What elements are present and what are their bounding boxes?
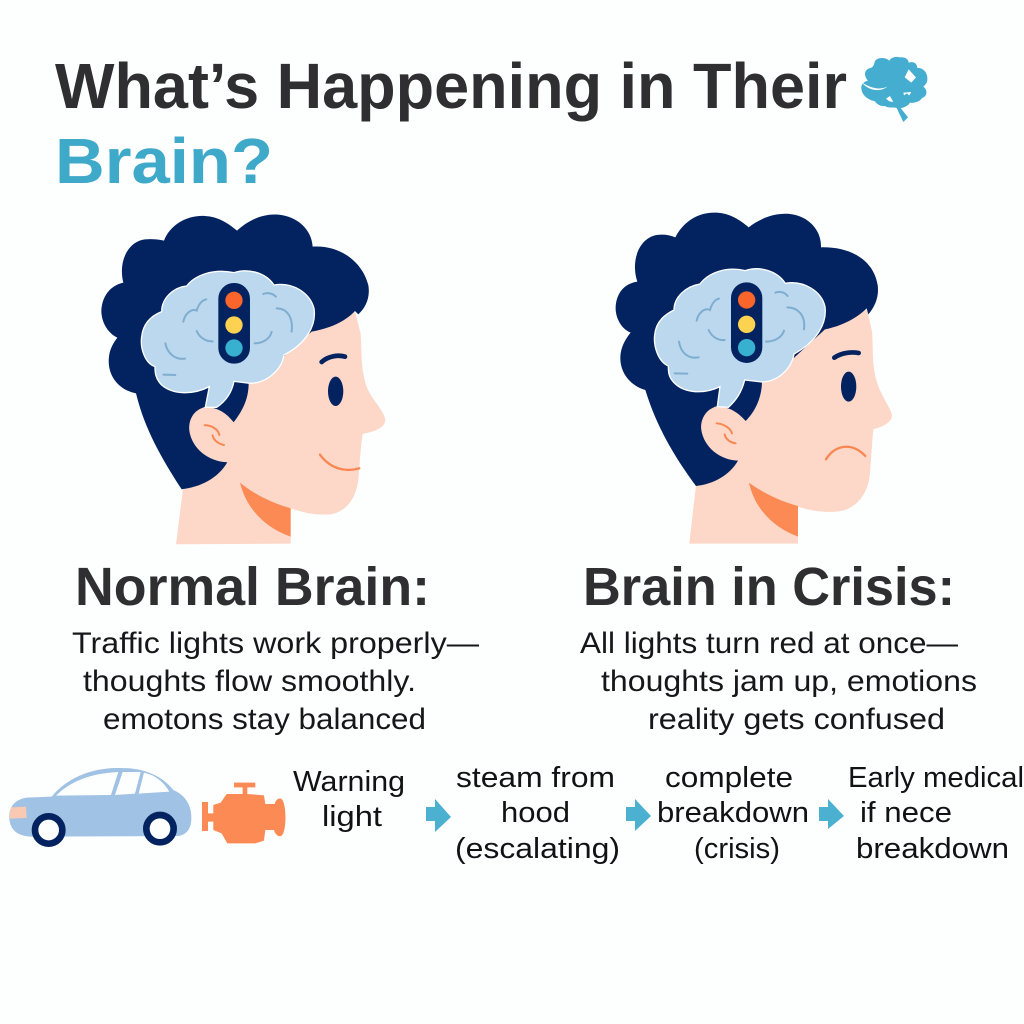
icon: car bbox=[9, 768, 191, 844]
arrow 1 bbox=[426, 799, 451, 832]
head skin bbox=[176, 312, 385, 544]
label: warning light bbox=[293, 766, 405, 833]
label: steam from hood: (escalating) bbox=[455, 833, 620, 865]
text block: crisis description bbox=[580, 627, 977, 736]
label: complete breakdown: breakdown bbox=[657, 797, 809, 829]
traffic light bbox=[218, 283, 250, 364]
eyebrow bbox=[322, 356, 345, 362]
arrow 3 bbox=[819, 799, 844, 829]
hair bbox=[616, 213, 878, 486]
title bbox=[55, 50, 847, 197]
label: steam from hood: hood bbox=[501, 797, 570, 829]
text block: normal brain description: emotons stay balanced bbox=[103, 703, 426, 736]
panel: crisis brain head bbox=[616, 213, 892, 544]
label: warning light: light bbox=[322, 801, 382, 833]
heading: normal brain: Normal Brain: bbox=[75, 557, 430, 617]
smile bbox=[320, 455, 359, 470]
icon: title brain bbox=[861, 57, 927, 122]
label: complete breakdown: (crisis) bbox=[694, 833, 780, 865]
label: early medical bbox=[848, 762, 1024, 865]
brain folds bbox=[163, 293, 292, 375]
jaw shadow bbox=[749, 483, 798, 537]
eyebrow bbox=[834, 352, 859, 358]
traffic light bbox=[731, 282, 762, 363]
panel: normal brain head bbox=[101, 214, 385, 544]
label: complete breakdown: complete bbox=[665, 762, 793, 794]
label: steam from hood bbox=[455, 762, 620, 865]
eye bbox=[328, 377, 343, 406]
icon: engine bbox=[202, 783, 285, 843]
title: What’s Happening in Their bbox=[55, 50, 847, 122]
text block: crisis description: reality gets confused bbox=[648, 703, 945, 736]
hair bbox=[101, 214, 369, 489]
title: Brain? bbox=[55, 125, 273, 197]
eye bbox=[841, 372, 856, 402]
label: early medical: if nece bbox=[860, 797, 952, 829]
heading: brain in crisis: Brain in Crisis: bbox=[583, 557, 955, 617]
ear bbox=[189, 407, 250, 462]
label: steam from hood: steam from bbox=[456, 762, 615, 794]
text block: normal brain description: thoughts flow smoothly. bbox=[83, 665, 416, 698]
label: early medical: breakdown bbox=[856, 833, 1009, 865]
label: complete breakdown bbox=[657, 762, 809, 865]
brain bbox=[141, 271, 314, 407]
text block: normal brain description bbox=[72, 627, 479, 736]
text block: crisis description: thoughts jam up, emotions bbox=[601, 665, 977, 698]
frown bbox=[826, 447, 865, 459]
brain folds bbox=[675, 292, 804, 374]
label: warning light: Warning bbox=[293, 766, 405, 798]
arrow 2 bbox=[626, 799, 651, 831]
label: early medical: Early medical bbox=[848, 762, 1024, 794]
text block: crisis description: All lights turn red at once— bbox=[580, 627, 958, 660]
jaw shadow bbox=[240, 483, 291, 537]
text block: normal brain description: Traffic lights work properly— bbox=[72, 627, 479, 660]
brain bbox=[654, 269, 825, 407]
ear bbox=[701, 406, 762, 461]
head skin bbox=[689, 310, 892, 544]
